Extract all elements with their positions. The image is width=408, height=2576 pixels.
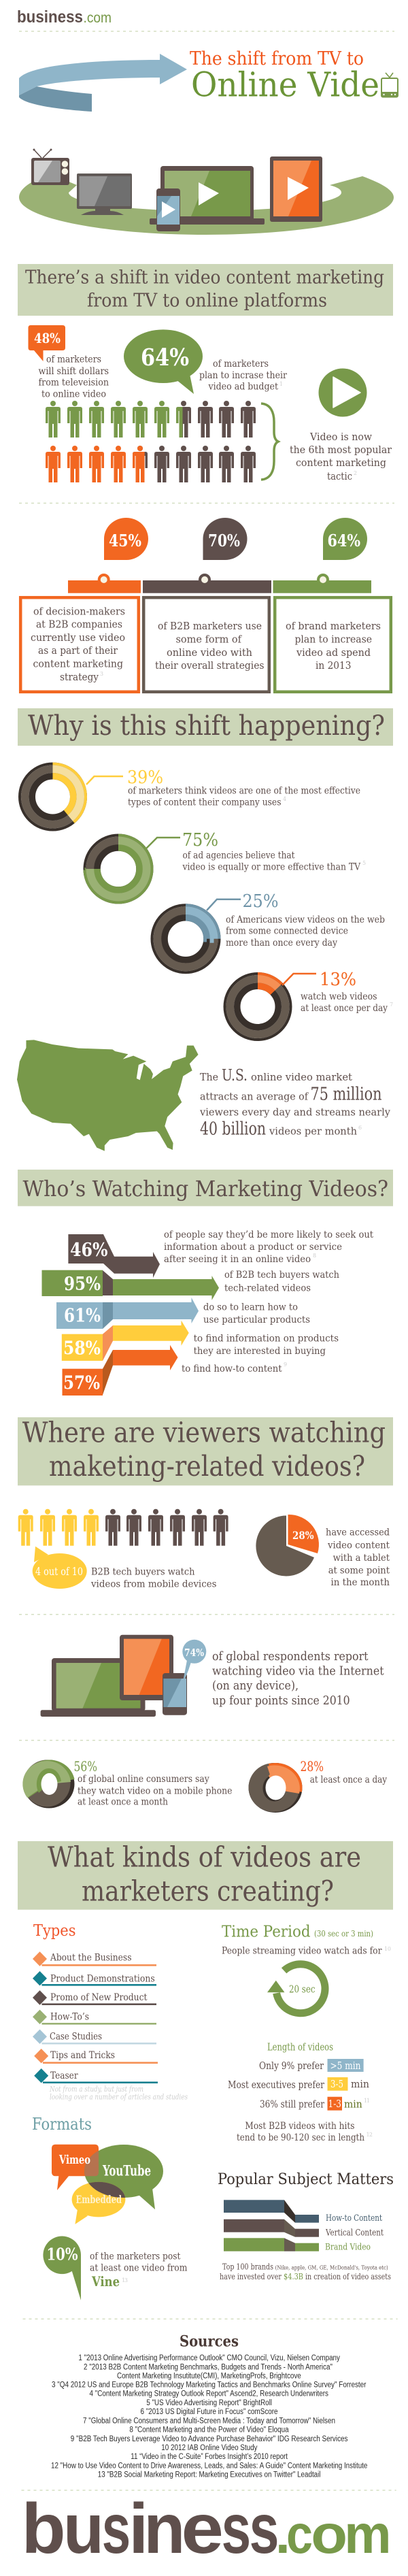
text: global respondents: up four points since 2010 bbox=[212, 1694, 350, 1708]
donut chart: 39% bbox=[20, 763, 123, 830]
text: 48% description: from televeision bbox=[38, 378, 109, 389]
list item: how-tos bbox=[33, 2010, 156, 2025]
panel: B2B marketers: some form of bbox=[175, 635, 243, 646]
list item: product demonstrations: Product Demonstrations bbox=[50, 1974, 155, 1985]
stat: 70% teardrop: 70% bbox=[208, 531, 240, 550]
text: 39% stat: types of content their company uses bbox=[128, 797, 282, 808]
text: vine: Vine bbox=[91, 2273, 120, 2290]
text: U.S. market: viewers every day and streams nearly bbox=[199, 1107, 391, 1118]
footer logo: e bbox=[181, 2490, 224, 2569]
row: 1-3 min bbox=[260, 2097, 370, 2111]
devices illustration bbox=[41, 1635, 187, 1717]
footer logo: m bbox=[344, 2504, 392, 2564]
title bbox=[190, 48, 398, 105]
heading banner: what kinds bbox=[18, 1840, 393, 1910]
donut chart: 28% daily bbox=[249, 1763, 303, 1813]
panel: decision-makers: content marketing bbox=[33, 659, 123, 670]
text: 46%: 8 bbox=[313, 1253, 316, 1259]
heading: time period: Time Period bbox=[222, 1923, 311, 1941]
panel: B2B marketers bbox=[143, 597, 269, 692]
arrow: 57% bbox=[63, 1345, 178, 1396]
arrow: 46% bbox=[68, 1234, 160, 1278]
text: 58%: to find information on products bbox=[194, 1334, 339, 1344]
text: 64% description bbox=[199, 359, 287, 393]
heading banner: where: maketing-related videos? bbox=[49, 1450, 365, 1483]
text: 48% description: will shift dollars bbox=[38, 366, 109, 377]
footer logo: i bbox=[129, 2490, 148, 2569]
text: global respondents: (on any device), bbox=[212, 1679, 299, 1693]
text: 64% description: plan to incrase their bbox=[199, 370, 287, 381]
stat: 64% teardrop bbox=[323, 518, 367, 560]
panel: B2B marketers: online video with bbox=[167, 648, 252, 659]
callout: 64% bubble bbox=[124, 329, 203, 394]
text: 46%: after seeing it in an online video bbox=[164, 1254, 311, 1265]
panel: decision-makers: as a part of their bbox=[38, 646, 118, 657]
footer logo: c bbox=[286, 2504, 313, 2564]
donut chart: 13% bbox=[224, 974, 316, 1040]
panel: time period bbox=[222, 1923, 391, 2143]
text: 48% description: to online video bbox=[41, 389, 106, 399]
text: 6th most popular: the 6th most popular bbox=[290, 444, 392, 456]
text: top 100 brands: Top 100 brands bbox=[222, 2262, 273, 2272]
donut chart: 75% bbox=[84, 836, 180, 902]
arrow: 95%: 95% bbox=[64, 1274, 101, 1295]
source list: 4 "Content Marketing Strategy Outlook Report" Ascend2, Research Underwriters bbox=[90, 2390, 328, 2398]
text: 28% daily: 28% bbox=[301, 1758, 324, 1774]
text: top 100 brands: (Nike, apple, GM, GE, McDonald's, Toyota etc) bbox=[275, 2264, 388, 2272]
stepped bar: brand video: Brand Video bbox=[325, 2243, 371, 2253]
text: vine: 13 bbox=[122, 2277, 128, 2283]
text: 39% stat: of marketers think videos are one of the most effective bbox=[128, 786, 360, 797]
text: mobile devices bbox=[90, 1566, 216, 1589]
chat bubbles: video platforms bbox=[52, 2145, 163, 2224]
icon: 20 sec cycle arrow bbox=[267, 1964, 325, 2013]
text: tablet: video content bbox=[327, 1540, 390, 1551]
text: mobile devices: B2B tech buyers watch bbox=[91, 1566, 194, 1577]
stepped bar: how-to content bbox=[224, 2200, 383, 2224]
footer logo: b bbox=[22, 2490, 66, 2569]
note: Not from a study, but just from bbox=[49, 2085, 143, 2094]
text: 13% stat: at least once per day bbox=[301, 1003, 388, 1014]
text: U.S. market: videos per month bbox=[269, 1127, 357, 1138]
pictogram: orange row bbox=[46, 446, 256, 482]
panel: brand marketers bbox=[275, 597, 391, 692]
text: 6th most popular: tactic bbox=[327, 470, 352, 482]
icon: 20 sec cycle arrow: 20 sec bbox=[289, 1983, 316, 1995]
donut chart: 56% bbox=[22, 1760, 75, 1809]
list item: case studies bbox=[33, 2030, 156, 2045]
text: U.S. market: The bbox=[200, 1072, 218, 1083]
icon: laptop bbox=[150, 166, 265, 225]
callout: 64% bubble: 64% bbox=[141, 344, 189, 371]
text: U.S. market: attracts an average of bbox=[200, 1092, 309, 1103]
text: 75% stat: video is equally or more effective than TV bbox=[182, 862, 361, 873]
list item: case studies: Case Studies bbox=[50, 2032, 102, 2043]
text: global respondents: of global respondents report bbox=[212, 1649, 369, 1664]
row: 3-5 min: Most executives prefer bbox=[228, 2079, 325, 2091]
text: 61%: do so to learn how to bbox=[203, 1302, 298, 1313]
row: 5 min: Only 9% prefer bbox=[259, 2060, 324, 2072]
list item: product demonstrations bbox=[33, 1971, 156, 1986]
callout: 48%: 48% bbox=[34, 330, 61, 346]
arrow: 61%: 61% bbox=[64, 1306, 101, 1327]
source list bbox=[51, 2354, 367, 2479]
donut chart: 25% bbox=[152, 899, 241, 972]
note bbox=[49, 2085, 188, 2102]
text: 56% bbox=[73, 1758, 233, 1808]
row: 1-3 min: 11 bbox=[364, 2098, 370, 2104]
stepped bar: vertical content: Vertical Content bbox=[325, 2228, 384, 2239]
icon: old tv bbox=[31, 148, 69, 185]
footer logo: n bbox=[143, 2490, 185, 2569]
source list: 8 "Content Marketing and the Power of Video" Eloqua bbox=[129, 2426, 289, 2434]
text: 48% description bbox=[38, 354, 109, 399]
text: tablet: at some point bbox=[328, 1565, 390, 1576]
text: U.S. market: online video market bbox=[251, 1072, 352, 1083]
text: 6th most popular: Video is now bbox=[309, 431, 372, 443]
stat: 70% teardrop bbox=[203, 518, 248, 560]
pie chart: 28% tablet: 28% bbox=[292, 1529, 314, 1542]
arrow: 46%: 46% bbox=[70, 1240, 107, 1261]
stat: 10% teardrop: 10% bbox=[46, 2245, 78, 2264]
text: 25% stat: from some connected device bbox=[226, 926, 348, 937]
panel: brand marketers: of brand marketers bbox=[286, 621, 381, 632]
list item: tips and tricks bbox=[34, 2049, 158, 2064]
text: 25% stat bbox=[226, 891, 385, 948]
text: vine: at least one video from bbox=[90, 2263, 187, 2274]
icon: phone bbox=[163, 1673, 187, 1715]
text: 6th most popular: 2 bbox=[354, 470, 357, 476]
list item: promo of new product: Promo of New Product bbox=[50, 1992, 148, 2003]
hero illustration: devices on ring bbox=[19, 148, 394, 235]
text: 25% stat: more than once every day bbox=[226, 938, 337, 948]
stat: 64% teardrop: 64% bbox=[328, 531, 360, 550]
text: B2B length: Most B2B videos with hits bbox=[245, 2121, 355, 2132]
source list: 1 "2013 Online Advertising Performance Outlook" CMO Council, Vizu, Nielsen Company bbox=[78, 2354, 340, 2362]
panel: decision-makers: at B2B companies bbox=[36, 620, 122, 631]
text: 95%: tech-related videos bbox=[224, 1283, 311, 1293]
text: U.S. market bbox=[199, 1067, 391, 1140]
text: top 100 brands: $4.3B bbox=[284, 2272, 303, 2281]
stepped bar: how-to content: How-to Content bbox=[326, 2213, 383, 2224]
chat bubbles: video platforms: YouTube bbox=[102, 2162, 151, 2179]
panel: popular subject matters bbox=[218, 2171, 394, 2281]
heading banner: shift: from TV to online platforms bbox=[87, 290, 327, 312]
text: 95%: of B2B tech buyers watch bbox=[224, 1270, 339, 1281]
footer logo: s bbox=[222, 2490, 251, 2569]
text: 64% description: of marketers bbox=[213, 359, 269, 369]
source list: 9 "B2B Tech Buyers Leverage Video to Advance Purchase Behavior" IDG Research Services bbox=[71, 2435, 348, 2443]
text: U.S. market: 6 bbox=[358, 1125, 362, 1131]
panel: decision-makers: currently use video bbox=[31, 633, 125, 644]
text: 46%: of people say they’d be more likely to seek out bbox=[164, 1229, 373, 1240]
text: tablet: in the month bbox=[330, 1577, 390, 1588]
footer logo: s bbox=[102, 2490, 131, 2569]
text: 56%: at least once a month bbox=[78, 1797, 168, 1808]
text: vine: of the marketers post bbox=[90, 2251, 181, 2262]
text: B2B length bbox=[237, 2121, 373, 2143]
callout: 74% bubble: 74% bbox=[184, 1647, 204, 1659]
panel: B2B marketers: their overall strategies bbox=[155, 661, 264, 672]
text: 13% stat: 7 bbox=[390, 1002, 393, 1008]
source list: 6 "2013 US Digital Future in Focus" comScore bbox=[140, 2408, 277, 2416]
list item: how-tos: How-To’s bbox=[50, 2011, 89, 2022]
text: 57%: to find how-to content bbox=[182, 1364, 282, 1374]
footer logo: u bbox=[63, 2490, 104, 2569]
text: 48% description: of marketers bbox=[46, 354, 101, 365]
icon: tv as letter o bbox=[381, 73, 398, 97]
text: 64% description: video ad budget bbox=[208, 382, 278, 393]
text: U.S. market: 75 million bbox=[310, 1085, 382, 1105]
text: global respondents bbox=[212, 1649, 384, 1708]
arrow: 95% bbox=[42, 1270, 219, 1300]
text: 61%: use particular products bbox=[203, 1315, 310, 1325]
panel: B2B marketers: of B2B marketers use bbox=[158, 621, 262, 632]
text: 39% stat: 4 bbox=[283, 796, 286, 802]
map: United States bbox=[17, 1040, 199, 1151]
icon: phone bbox=[156, 188, 180, 231]
heading banner: who: Who’s Watching Marketing Videos? bbox=[23, 1176, 388, 1202]
text: 56%: they watch video on a mobile phone bbox=[78, 1786, 233, 1797]
text: 75% stat bbox=[182, 830, 366, 873]
text: 64% description: 1 bbox=[279, 381, 283, 387]
list item: about the business bbox=[33, 1951, 156, 1966]
text: 13% stat: 13% bbox=[320, 970, 356, 990]
source list: 10 2012 IAB Online Video Study bbox=[161, 2444, 258, 2452]
footer logo: . bbox=[275, 2504, 290, 2564]
text: 28% daily: at least once a day bbox=[310, 1774, 387, 1785]
text: tablet: have accessed bbox=[326, 1528, 390, 1538]
heading: types: Types bbox=[33, 1922, 76, 1940]
stepped bar: vertical content bbox=[224, 2219, 384, 2239]
stat: 45% teardrop bbox=[104, 518, 148, 560]
panel: types bbox=[33, 1922, 188, 2102]
callout: 74% bubble bbox=[182, 1640, 206, 1685]
callout: 4 out of 10 bubble bbox=[33, 1547, 87, 1589]
list item: promo of new product bbox=[33, 1990, 156, 2005]
text: tablet: with a tablet bbox=[333, 1553, 390, 1564]
pie chart: 28% tablet bbox=[256, 1515, 319, 1576]
text: global respondents: watching video via the Internet bbox=[212, 1664, 384, 1679]
source list: 2 "2013 B2B Content Marketing Benchmarks, Budgets and Trends - North America" bbox=[84, 2363, 333, 2371]
text: 56%: of global online consumers say bbox=[78, 1774, 209, 1785]
stat: 10% teardrop bbox=[43, 2236, 81, 2300]
footer logo bbox=[22, 2490, 392, 2569]
source list: 3 "Q4 2012 US and Europe B2B Technology Marketing Tactics and Benchmarks Online Survey" Forrester bbox=[52, 2381, 367, 2390]
chat bubbles: video platforms: Embedded bbox=[76, 2193, 122, 2206]
footer logo: s bbox=[250, 2490, 279, 2569]
row: 3-5 min: 3-5 bbox=[330, 2078, 343, 2090]
text: mobile devices: videos from mobile devices bbox=[90, 1579, 216, 1589]
heading: length of videos: Length of videos bbox=[267, 2041, 333, 2053]
text: U.S. market: 40 billion bbox=[200, 1119, 266, 1140]
text: 58%: they are interested in buying bbox=[194, 1346, 326, 1357]
header logo: .com bbox=[83, 10, 112, 26]
text: 95% bbox=[224, 1270, 339, 1293]
sources bbox=[51, 2332, 367, 2479]
text: 25% stat: of Americans view videos on the web bbox=[226, 914, 385, 925]
arrow: 58% bbox=[62, 1321, 189, 1361]
text: 61% bbox=[203, 1302, 310, 1325]
heading: formats: Formats bbox=[32, 2115, 92, 2134]
list item: teaser: Teaser bbox=[50, 2070, 78, 2081]
text: streaming: 10 bbox=[384, 1946, 391, 1952]
text: 56%: 56% bbox=[73, 1758, 97, 1774]
text: 39% stat bbox=[127, 767, 360, 808]
list item: tips and tricks: Tips and Tricks bbox=[50, 2050, 115, 2061]
list item: teaser bbox=[34, 2068, 158, 2083]
panel: decision-makers: of decision-makers bbox=[33, 607, 125, 618]
source list: 13 "B2B Social Marketing Report: Marketing Executives on Twitter" Leadtail bbox=[98, 2471, 321, 2479]
green ring bbox=[19, 174, 394, 235]
panel: decision-makers: 3 bbox=[100, 671, 103, 677]
text: 57%: 9 bbox=[284, 1361, 287, 1368]
text: 75% stat: of ad agencies believe that bbox=[182, 851, 295, 861]
heading: popular subject matters: Popular Subject Matters bbox=[218, 2171, 394, 2188]
text: 6th most popular bbox=[290, 431, 392, 482]
list item: about the business: About the Business bbox=[50, 1953, 132, 1964]
text: 46% bbox=[164, 1229, 373, 1265]
connector tabs bbox=[68, 574, 371, 593]
icon: tablet bbox=[120, 1635, 173, 1700]
row: 3-5 min: min bbox=[351, 2078, 369, 2090]
pictogram: 4 out of 10 bbox=[18, 1509, 228, 1546]
arrow: 57%: 57% bbox=[63, 1373, 100, 1394]
text: tablet bbox=[326, 1528, 390, 1588]
title: The shift from TV to bbox=[190, 48, 364, 69]
source list: 11 “Video in the C-Suite” Forbes Insight’s 2010 report bbox=[131, 2453, 288, 2461]
source list: 5 "US Video Advertising Report" BrightRoll bbox=[146, 2399, 272, 2407]
text: 25% stat: 25% bbox=[242, 891, 279, 912]
icon: play circle bbox=[318, 369, 367, 416]
heading banner: where bbox=[18, 1416, 393, 1485]
panel: formats bbox=[32, 2115, 187, 2300]
row: 1-3 min: 36% still prefer bbox=[260, 2098, 325, 2111]
text: 13% stat: watch web videos bbox=[301, 991, 377, 1002]
text: top 100 brands: have invested over bbox=[220, 2272, 282, 2281]
text: B2B length: 12 bbox=[366, 2132, 373, 2138]
arrow: 58%: 58% bbox=[63, 1338, 101, 1359]
icon: tablet bbox=[270, 156, 322, 222]
arrow: 61% bbox=[56, 1298, 199, 1329]
source list: 7 "Global Online Consumers and Multi-Screen Media : Today and Tomorrow" Nielsen bbox=[83, 2417, 335, 2425]
header logo: business bbox=[17, 7, 83, 27]
text: 75% stat: 5 bbox=[362, 860, 366, 866]
pictogram: green row bbox=[46, 401, 256, 437]
text: B2B length: tend to be 90-120 sec in length bbox=[237, 2132, 364, 2143]
curved arrow bbox=[19, 54, 187, 112]
panel: brand marketers: in 2013 bbox=[316, 661, 351, 672]
stat: 45% teardrop: 45% bbox=[109, 531, 141, 550]
heading banner: who bbox=[18, 1170, 393, 1206]
heading banner: why: Why is this shift happening? bbox=[28, 710, 385, 742]
heading: time period bbox=[222, 1923, 373, 1941]
panel: brand marketers: plan to increase bbox=[295, 635, 372, 646]
panel: decision-makers: strategy bbox=[60, 672, 99, 683]
heading banner: shift bbox=[18, 264, 393, 316]
text: vine bbox=[90, 2251, 187, 2290]
text: 75% stat: 75% bbox=[182, 830, 218, 851]
heading banner: what kinds: marketers creating? bbox=[82, 1875, 334, 1907]
heading: time period: (30 sec or 3 min) bbox=[314, 1929, 373, 1938]
icon: desktop monitor bbox=[77, 174, 132, 215]
footer logo: o bbox=[311, 2504, 347, 2564]
text: 58% bbox=[194, 1334, 339, 1357]
brace bbox=[261, 403, 278, 480]
icon: laptop bbox=[41, 1658, 156, 1717]
panel: brand marketers: video ad spend bbox=[296, 648, 371, 659]
row: 1-3 min: min bbox=[344, 2098, 362, 2110]
text: 6th most popular: content marketing bbox=[296, 457, 386, 469]
text: top 100 brands bbox=[220, 2262, 391, 2281]
heading banner: what kinds: What kinds of videos are bbox=[48, 1840, 361, 1873]
note: looking over a number of articles and studies bbox=[50, 2093, 188, 2102]
text: U.S. market: U.S. bbox=[222, 1067, 248, 1085]
text: streaming: People streaming video watch ads for bbox=[222, 1946, 382, 1957]
panel: decision-makers bbox=[20, 597, 139, 692]
callout: 48% bbox=[29, 325, 65, 361]
source list: Content Marketing Insutitute(CMI), MarketingProfs, Brightcove bbox=[117, 2373, 301, 2381]
heading: sources: Sources bbox=[180, 2332, 239, 2350]
row: 5 min: >5 min bbox=[330, 2060, 361, 2072]
title: Online Vide bbox=[191, 65, 379, 105]
text: 28% daily bbox=[301, 1758, 387, 1785]
row: 1-3 min: 1-3 bbox=[328, 2098, 341, 2110]
callout: 4 out of 10 bubble: 4 out of 10 bbox=[35, 1565, 83, 1578]
text: 46%: information about a product or service bbox=[164, 1242, 342, 1253]
text: 13% stat bbox=[301, 970, 393, 1014]
chat bubbles: video platforms: Vimeo bbox=[58, 2153, 90, 2167]
stepped bar: brand video bbox=[224, 2238, 371, 2253]
text: 39% stat: 39% bbox=[127, 767, 163, 788]
